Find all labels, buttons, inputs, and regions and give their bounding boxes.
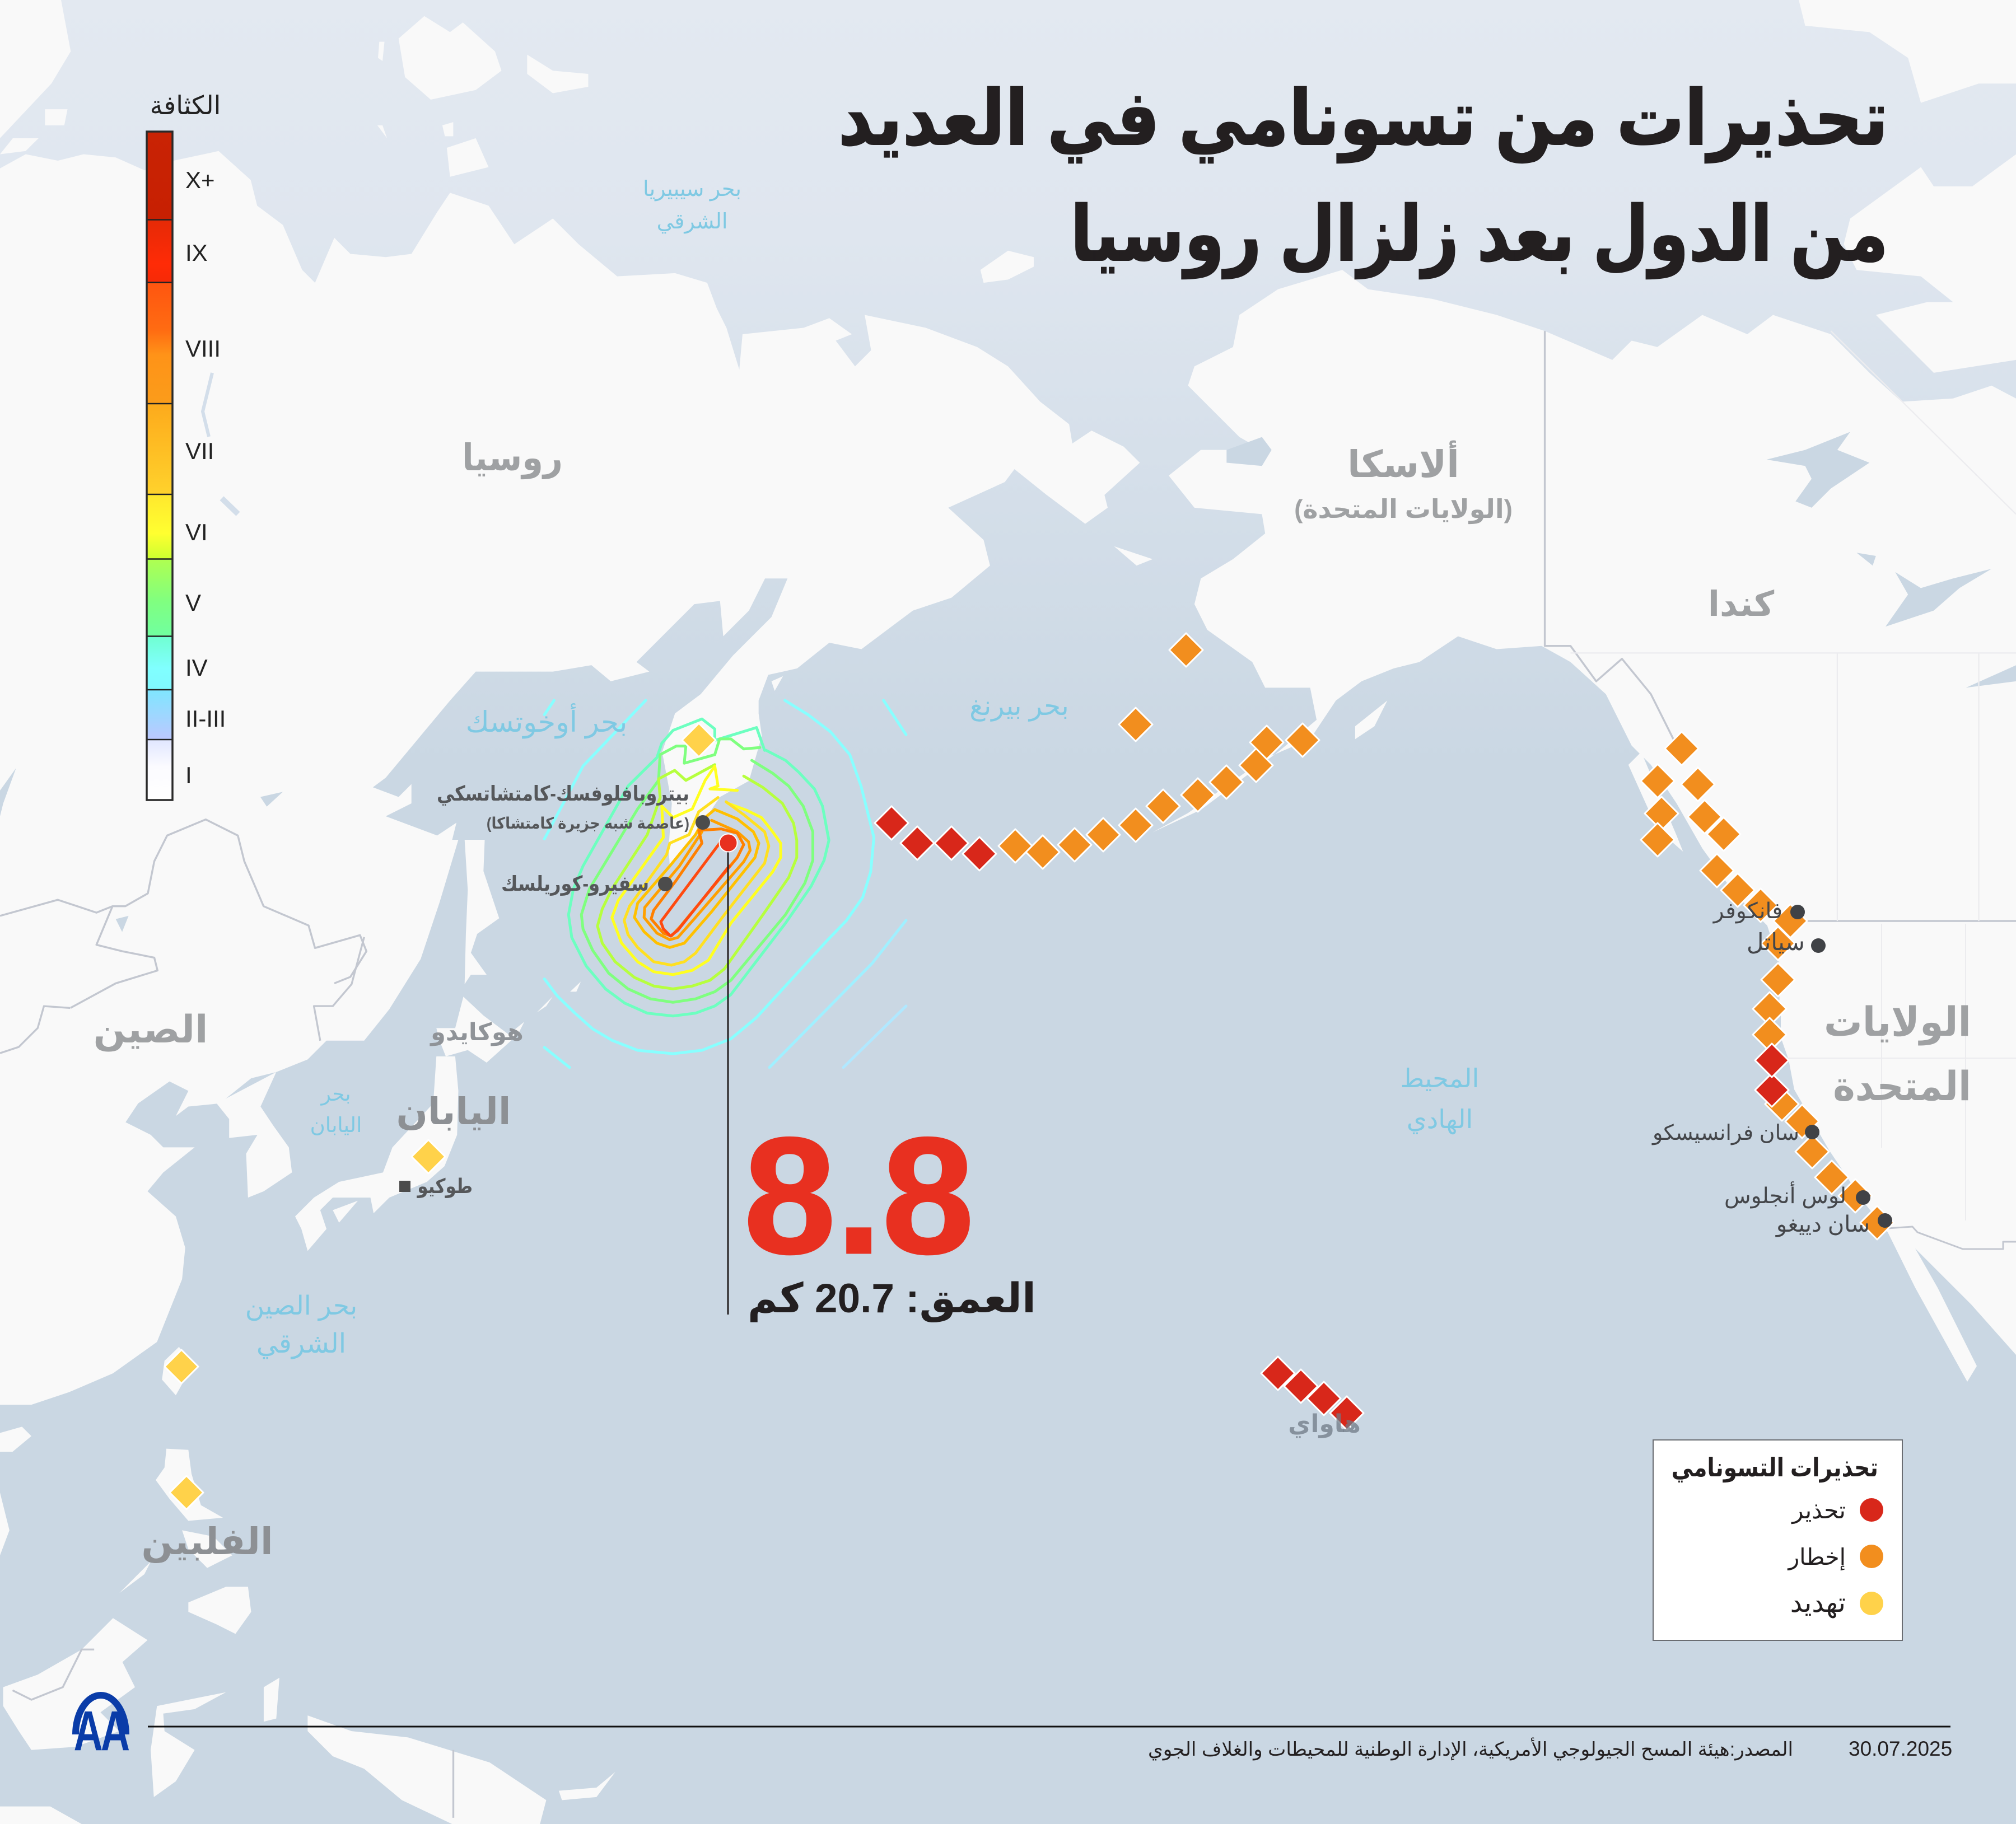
Tokyo label: طوكيو [417,1176,473,1199]
scale labels: VII [185,438,214,464]
scale labels: IV [185,654,208,681]
threat [1790,1588,1883,1619]
sea labels: الشرقي [256,1329,346,1359]
title: تحذيرات من تسونامي في العديد [838,76,1888,163]
diamonds: Hawaii [1261,1357,1364,1430]
sea labels: الشرقي [657,210,727,234]
intensity legend [147,91,226,800]
city markers and labels [399,783,1892,1237]
lakes and rivers [0,373,2016,932]
scale labels: IX [185,240,208,266]
icon: AA logo: AA [74,1700,129,1762]
advisory: إخطار [1787,1544,1846,1570]
sea labels: بحر الصين [245,1290,357,1321]
sea labels: الهادي [1407,1105,1473,1134]
city markers and labels: سان دييغو [1775,1212,1870,1237]
footer rule [148,1725,1950,1728]
city markers and labels: سياتل [1747,929,1805,955]
colour scale bar [147,132,172,800]
magnitude: 8.8 [744,1103,974,1288]
depth: العمق: 20.7 كم [748,1276,1036,1322]
date: 30.07.2025 [1849,1737,1952,1760]
region labels: (الولايات المتحدة) [1294,494,1513,524]
city markers and labels: لوس أنجلوس [1724,1181,1846,1209]
region labels: هاواي [1288,1410,1361,1438]
scale labels: I [185,762,192,788]
source text: المصدر:هيئة المسح الجيولوجي الأمريكية، الإدارة الوطنية للمحيطات والغلاف الجوي [1148,1737,1793,1761]
sea labels: اليابان [310,1114,362,1137]
region labels: هوكايدو [430,1019,524,1046]
advisory [1787,1544,1883,1570]
legend heading: تحذيرات التسونامي [1672,1453,1878,1483]
region labels: اليابان [396,1091,511,1132]
sea labels: بحر أوخوتسك [466,703,627,739]
epicentre leader line [727,845,729,1315]
Severo-Kurilsk label: سفيرو-كوريلسك [501,873,649,896]
warning [1791,1497,1883,1524]
region labels: الصين [94,1008,208,1052]
scale labels: V [185,590,201,616]
diamonds: North America west coast [1641,732,1894,1240]
tsunami legend panel [1653,1440,1902,1640]
city markers and labels: سان فرانسيسكو [1651,1121,1799,1145]
threat: تهديد [1790,1588,1846,1619]
Petropavlovsk label: بيتروبافلوفسك-كامتشاتسكي [437,783,689,806]
sea labels [245,177,1479,1359]
region labels: روسيا [462,438,563,480]
region labels: المتحدة [1833,1064,1971,1109]
scale labels: X+ [185,167,215,193]
scale labels: VI [185,519,208,545]
legend heading: الكثافة [150,91,221,120]
title: من الدول بعد زلزال روسيا [1070,191,1888,279]
region labels: الولايات [1824,999,1971,1045]
title [838,76,1888,279]
scale labels: VIII [185,335,221,362]
region labels: الفلبين [141,1521,273,1563]
region labels: ألاسكا [1347,440,1459,485]
scale labels [185,167,226,788]
sea labels: المحيط [1401,1064,1479,1093]
region labels [94,438,1971,1563]
epicentre marker [719,834,737,852]
warning: تحذير [1791,1497,1846,1524]
diamonds: threat (yellow) [165,723,716,1509]
sea labels: بحر بيرنغ [969,691,1069,722]
region labels: كندا [1708,585,1775,624]
diamonds: Aleutian chain and Alaska [875,633,1319,871]
sea labels: بحر سيبيريا [643,177,741,202]
US and Canada cities: فانكوفر [1712,899,1782,924]
shakemap intensity contours [544,700,906,1068]
city markers and labels: (عاصمة شبه جزيرة كامتشاكا) [487,815,689,833]
sea labels: بحر [320,1082,351,1106]
scale labels: II-III [185,705,226,732]
